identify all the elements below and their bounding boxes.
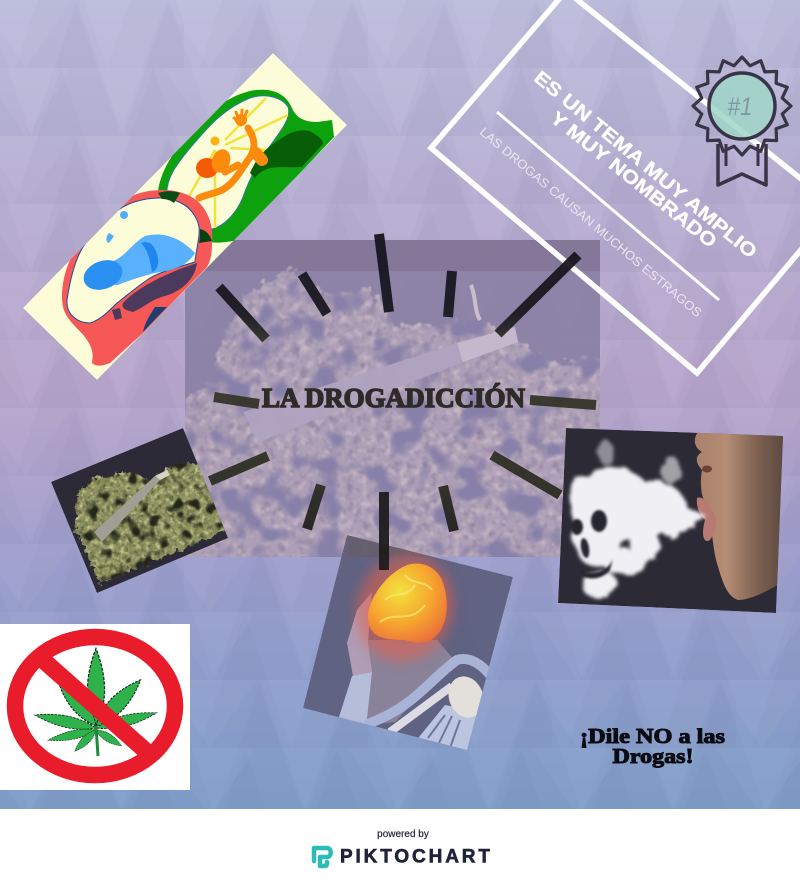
photo: joint on cannabis buds bbox=[51, 428, 228, 593]
overlap of the rings bbox=[158, 191, 180, 203]
prohibition ring bbox=[15, 637, 175, 775]
brain bbox=[368, 564, 447, 643]
skeleton body bbox=[338, 592, 490, 755]
note heading line 2: Y MUY NOMBRADO bbox=[546, 108, 720, 253]
photo: skeleton with glowing brain bbox=[303, 535, 513, 755]
green head bbox=[158, 90, 334, 243]
white frame bbox=[431, 0, 800, 373]
panel: white framed note bbox=[431, 0, 800, 373]
title: LA DROGADICCIÓN bbox=[262, 383, 525, 413]
skull eyes and mouth bbox=[571, 510, 613, 578]
photo: smoke skull bbox=[558, 428, 785, 613]
smoke bbox=[569, 441, 705, 599]
panel: central cannabis photo bbox=[178, 240, 610, 560]
note subtext: LAS DROGAS CAUSAN MUCHOS ESTRAGOS bbox=[477, 125, 704, 320]
buds bbox=[75, 462, 228, 585]
small joint bbox=[94, 476, 160, 542]
footer: Piktochart branding: PIKTOCHART bbox=[340, 846, 490, 868]
panel: rotated illustration of two heads bbox=[23, 53, 347, 380]
icon: Piktochart logo bbox=[314, 848, 331, 866]
vertical sunburst ray bbox=[379, 492, 389, 570]
note heading line 1: ES UN TEMA MUY AMPLIO bbox=[530, 67, 761, 263]
face bbox=[695, 432, 785, 600]
sunburst rays bbox=[210, 234, 596, 531]
orange figure bbox=[196, 110, 262, 198]
icon: #1 award badge bbox=[693, 57, 791, 185]
icon: #1 award badge: #1 bbox=[728, 93, 752, 121]
joint bbox=[243, 285, 518, 442]
slogan bbox=[580, 724, 725, 768]
cannabis buds bbox=[178, 268, 610, 560]
footer: Piktochart branding: powered by bbox=[377, 829, 429, 840]
slogan: Drogas! bbox=[612, 744, 694, 768]
red head bbox=[62, 190, 212, 366]
footer: Piktochart branding bbox=[0, 809, 800, 889]
panel: no marijuana sign bbox=[0, 624, 190, 790]
brain glow bbox=[350, 549, 460, 666]
cannabis leaf bbox=[34, 648, 158, 756]
slogan: ¡Dile NO a las bbox=[580, 724, 725, 748]
